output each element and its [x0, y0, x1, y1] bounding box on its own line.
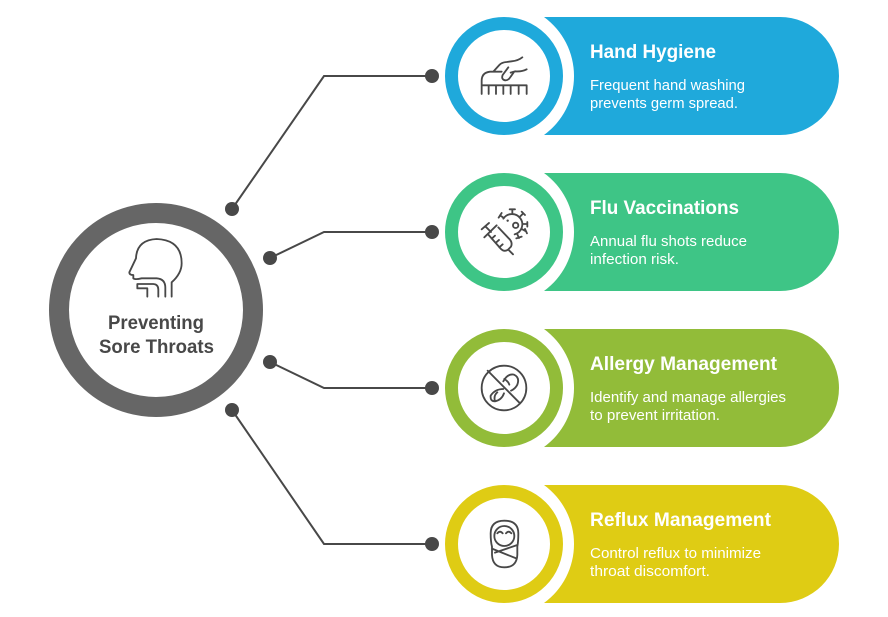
hub ring	[59, 213, 253, 407]
heading: Flu Vaccinations	[590, 198, 739, 219]
hub title	[99, 312, 214, 358]
description: Annual flu shots reduce	[590, 233, 747, 250]
icon ring	[452, 180, 556, 284]
description: Control reflux to minimize	[590, 545, 761, 562]
description: prevents germ spread.	[590, 95, 738, 112]
description: Frequent hand washing	[590, 77, 745, 94]
description	[590, 233, 747, 268]
icon ring	[452, 24, 556, 128]
icon: swaddled baby	[491, 521, 518, 567]
icon: head and throat	[129, 239, 182, 297]
panel: reflux management	[452, 485, 839, 603]
panel background	[544, 17, 839, 135]
icon ring	[452, 492, 556, 596]
connector: reflux management	[225, 403, 439, 551]
icon ring	[452, 336, 556, 440]
icon: crossed out peanut	[482, 366, 526, 410]
hub title: Sore Throats	[99, 336, 214, 358]
description	[590, 389, 786, 424]
description: to prevent irritation.	[590, 407, 720, 424]
central hub: preventing sore throats	[59, 213, 253, 407]
icon: hand on comb	[482, 57, 527, 94]
panel: flu vaccinations	[452, 173, 839, 291]
description: throat discomfort.	[590, 563, 710, 580]
panel: hand hygiene	[452, 17, 839, 135]
panel background	[544, 173, 839, 291]
connector: allergy management	[263, 355, 439, 395]
panel background	[544, 485, 839, 603]
description: Identify and manage allergies	[590, 389, 786, 406]
icon: syringe and virus	[482, 209, 527, 254]
hub title: Preventing	[108, 312, 204, 334]
heading: Hand Hygiene	[590, 42, 716, 63]
connector: flu vaccinations	[263, 225, 439, 265]
panel background	[544, 329, 839, 447]
connector: hand hygiene	[225, 69, 439, 216]
description	[590, 545, 761, 580]
panel: allergy management	[452, 329, 839, 447]
description: infection risk.	[590, 251, 679, 268]
heading: Reflux Management	[590, 510, 772, 531]
description	[590, 77, 745, 112]
heading: Allergy Management	[590, 354, 778, 375]
